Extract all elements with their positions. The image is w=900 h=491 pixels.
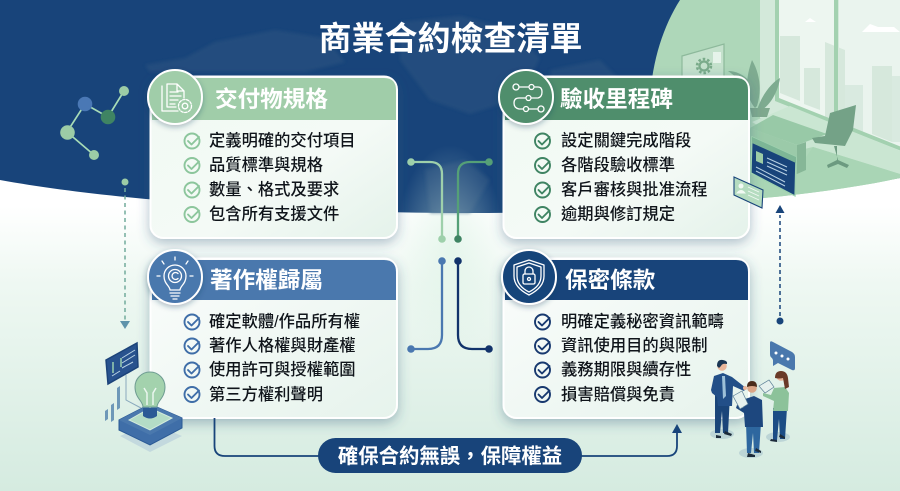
checklist [535,131,708,224]
panel: 著作權歸屬 [148,250,397,418]
checklist: 第三方權利聲明 [209,385,323,404]
icon: team of business people [710,341,795,458]
office scene [652,0,900,198]
icon: copyright bulb [148,250,202,304]
world map backdrop [145,16,630,213]
heading: 保密條款 [565,267,656,293]
checklist: 各階段驗收標準 [561,156,675,174]
title: 商業合約檢查清單 [318,20,582,57]
checklist: 設定關鍵完成階段 [561,131,691,150]
checklist: 品質標準與規格 [209,156,323,174]
checklist: 著作人格權與財產權 [209,336,356,355]
checklist: 義務期限與續存性 [561,361,691,379]
icon: route milestones [499,70,553,124]
checklist: 數量、格式及要求 [209,181,339,199]
footer flow line [214,418,682,456]
checklist: 損害賠償與免責 [561,385,675,404]
footer banner [318,438,582,473]
checklist: 定義明確的交付項目 [209,131,356,150]
checklist [184,312,360,404]
checklist: 客戶審核與批准流程 [561,180,708,199]
panel: 驗收里程碑 [499,70,749,238]
heading: 驗收里程碑 [560,86,673,112]
checklist: 明確定義秘密資訊範疇 [561,312,724,331]
icon: speech bubble [770,341,795,370]
checklist [184,131,356,224]
network graph icon [60,86,129,160]
checklist [535,312,724,404]
checklist: 確定軟體/作品所有權 [209,312,360,331]
connector lines [407,158,493,353]
icon: profile card [734,177,763,208]
figure: man in suit [711,360,747,438]
center glow [395,145,505,355]
panel: 保密條款 [502,250,749,418]
checklist: 包含所有支援文件 [209,204,339,224]
panel: 交付物規格 [148,70,397,238]
figure: woman in green [759,371,789,442]
icon: document gear [148,70,202,124]
heading: 著作權歸屬 [210,268,323,293]
checklist: 逾期與修訂規定 [561,204,675,224]
checklist: 使用許可與授權範圍 [209,360,356,379]
icon: browser window [751,137,796,196]
checklist: 資訊使用目的與限制 [561,336,708,355]
figure: man holding tablet [733,381,763,457]
icon: code screen [106,343,138,384]
dashed arrow left [120,178,130,329]
footer banner: 確保合約無誤，保障權益 [338,444,562,468]
icon: lightbulb on platform [105,343,182,452]
heading: 交付物規格 [215,86,328,112]
dashed arrow right [776,205,784,324]
icon: shield lock [502,250,556,304]
